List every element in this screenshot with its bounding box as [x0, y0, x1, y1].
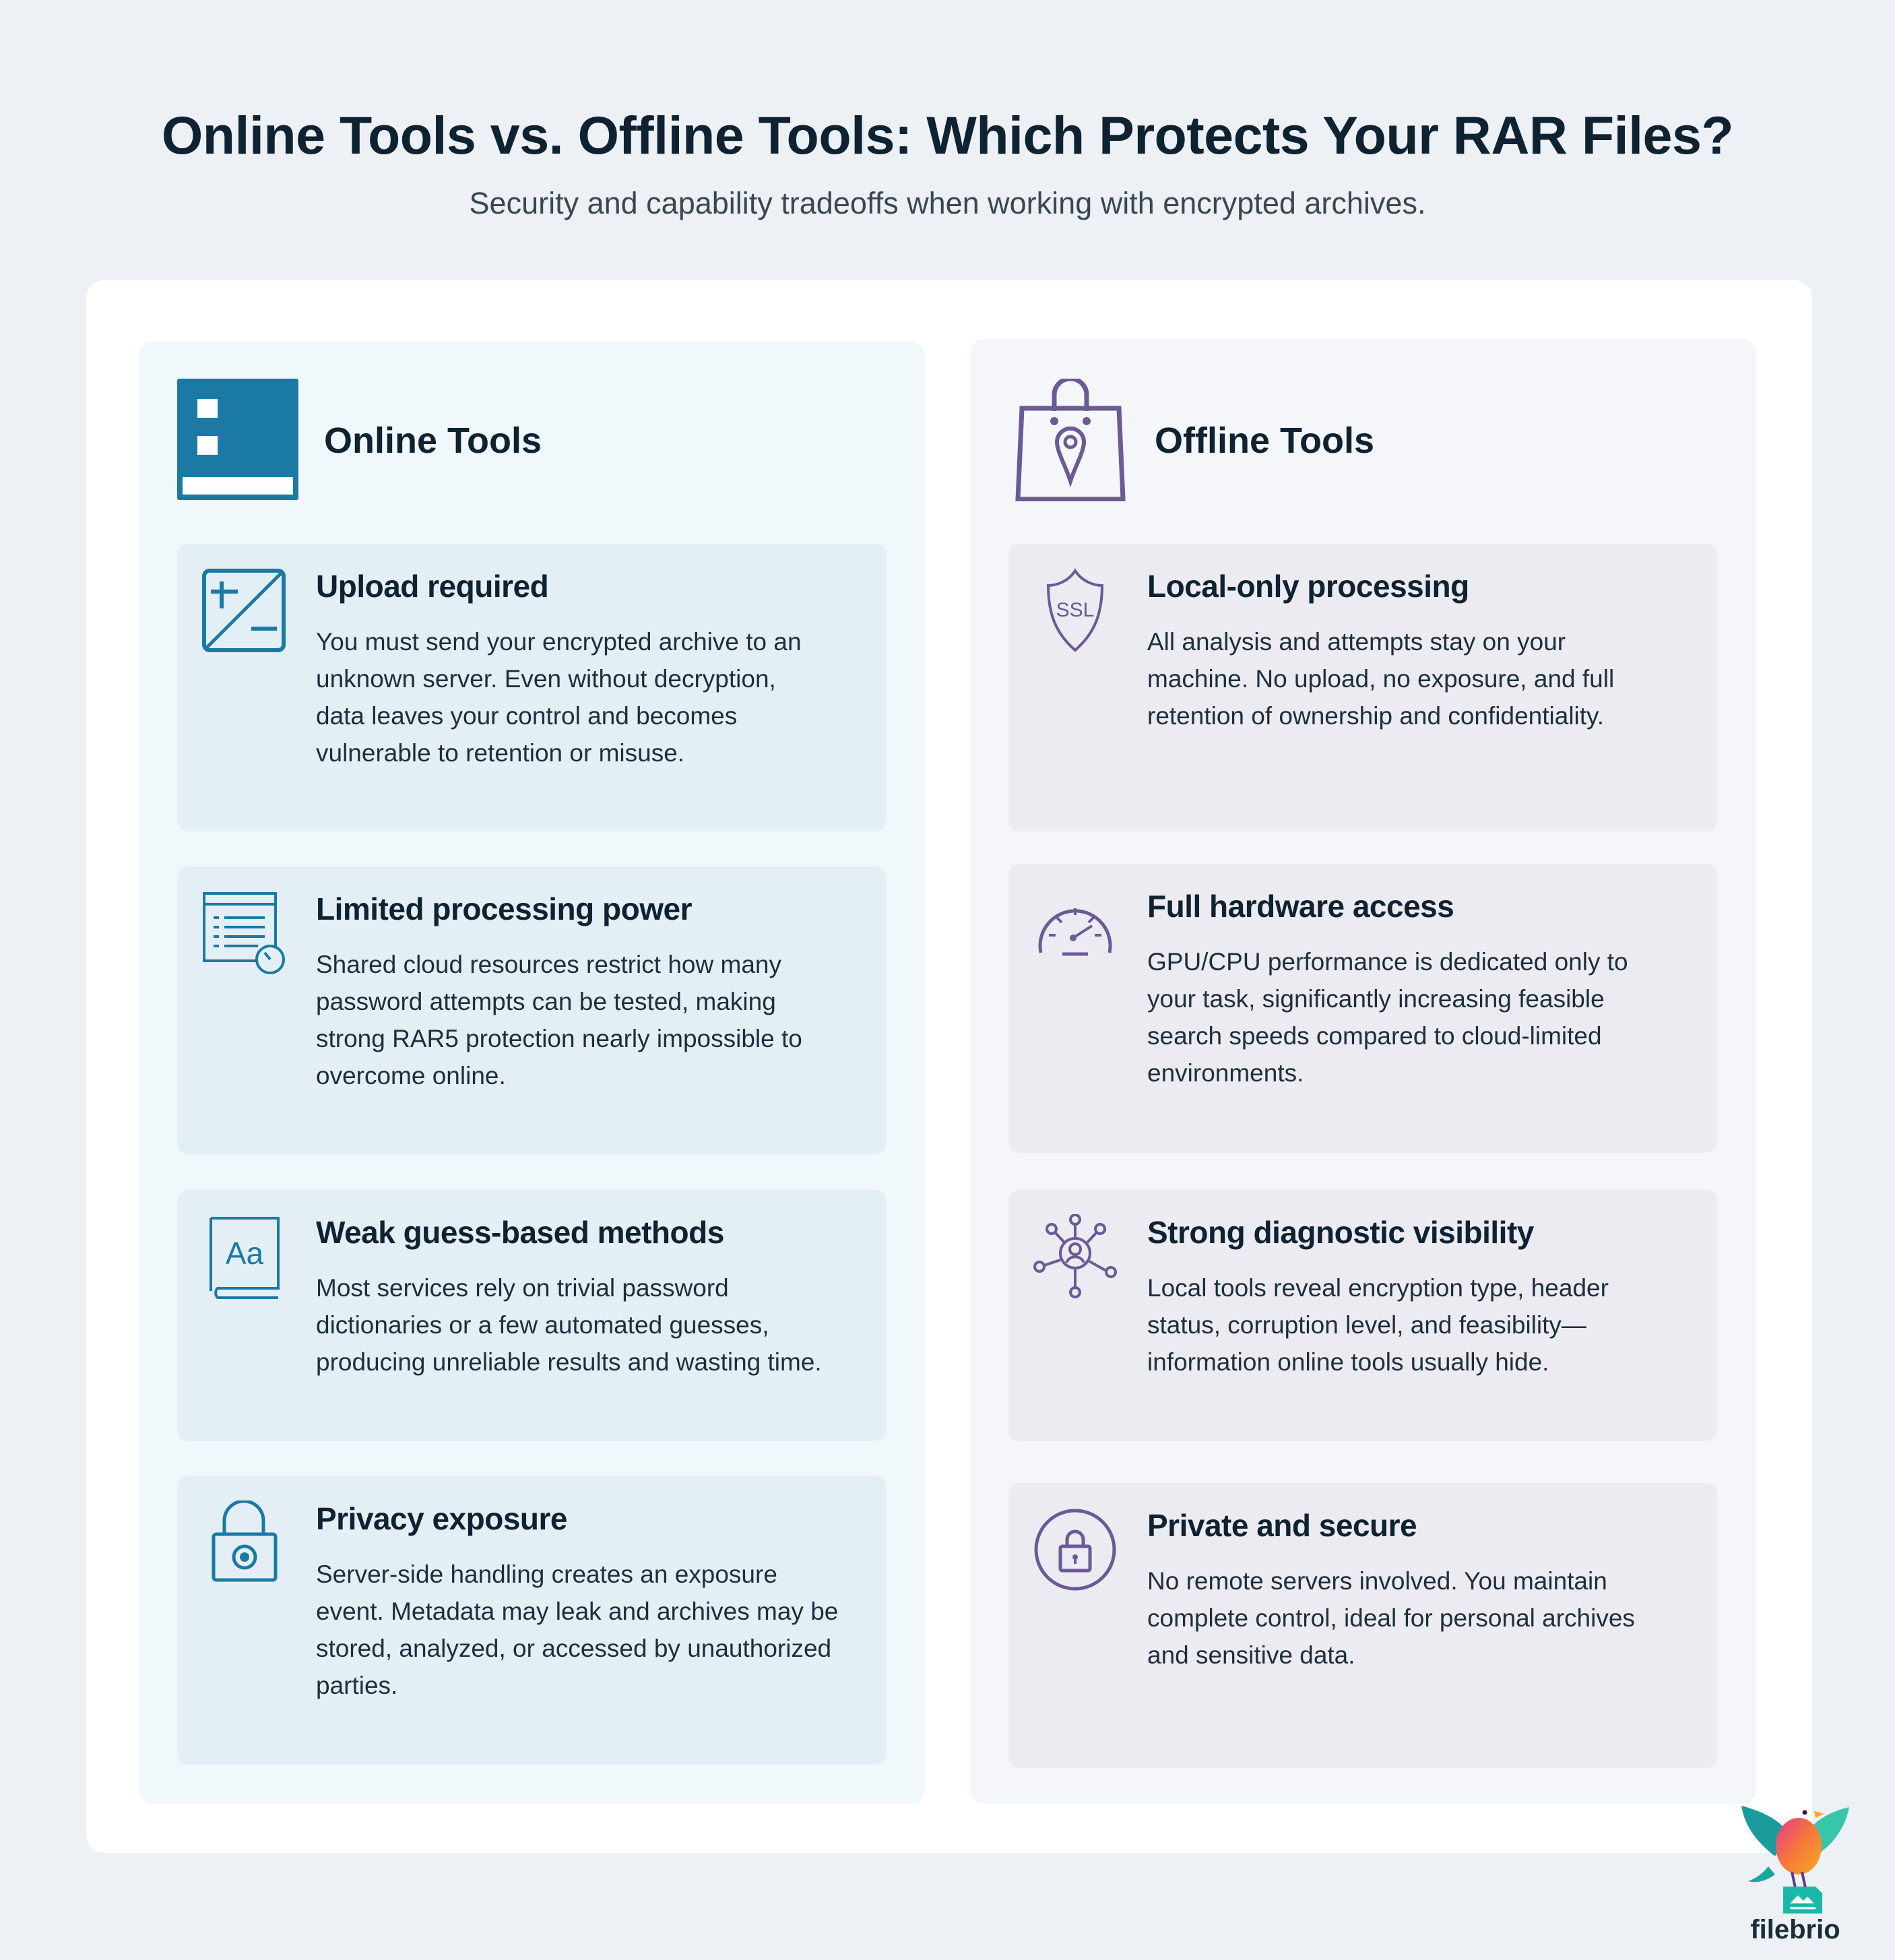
- item text: data leaves your control and becomes: [316, 702, 737, 730]
- icon: dictionary: [210, 1217, 280, 1299]
- icon: dictionary: Aa: [226, 1236, 264, 1271]
- item title: Strong diagnostic visibility: [1147, 1215, 1534, 1250]
- item text: event. Metadata may leak and archives may be: [316, 1598, 838, 1625]
- item text: Most services rely on trivial password: [316, 1274, 729, 1302]
- item text: All analysis and attempts stay on your: [1147, 628, 1566, 656]
- item text: [316, 951, 802, 1089]
- panel: offline tools: [970, 339, 1756, 1804]
- icon: bird on file: [1741, 1806, 1849, 1914]
- item: local-only processing: [1008, 544, 1717, 831]
- item text: unknown server. Even without decryption,: [316, 665, 776, 693]
- icon: network: [1033, 1214, 1117, 1298]
- item text: You must send your encrypted archive to an: [316, 628, 802, 656]
- item text: password attempts can be tested, making: [316, 988, 776, 1015]
- item text: retention of ownership and confidentiality.: [1147, 702, 1604, 730]
- item: strong diagnostic visibility: [1008, 1190, 1717, 1441]
- item title: Upload required: [316, 569, 548, 604]
- item text: [1147, 628, 1614, 730]
- item: upload required: [177, 544, 887, 831]
- item text: Local tools reveal encryption type, header: [1147, 1274, 1609, 1302]
- item text: status, corruption level, and feasibility—: [1147, 1311, 1586, 1339]
- icon: online tools header: [177, 379, 298, 500]
- item text: strong RAR5 protection nearly impossible to: [316, 1025, 802, 1052]
- item text: vulnerable to retention or misuse.: [316, 739, 684, 767]
- icon: SSL shield: [1047, 568, 1103, 652]
- logo: filebrio: [1741, 1806, 1849, 1945]
- icon: circled lock: [1035, 1509, 1116, 1590]
- item text: [1147, 1567, 1635, 1669]
- item: full hardware access: [1008, 864, 1717, 1153]
- icon: speedometer: [1039, 908, 1112, 955]
- item: weak guess-based methods: [177, 1190, 887, 1441]
- subtitle: Security and capability tradeoffs when working with encrypted archives.: [470, 186, 1425, 220]
- item text: overcome online.: [316, 1062, 506, 1089]
- item text: GPU/CPU performance is dedicated only to: [1147, 948, 1628, 976]
- item text: [1147, 948, 1628, 1087]
- item text: environments.: [1147, 1059, 1304, 1087]
- item text: [316, 1560, 838, 1699]
- item text: producing unreliable results and wasting time.: [316, 1348, 822, 1376]
- panel: online tools: [139, 342, 925, 1804]
- icon: SSL shield: SSL: [1056, 599, 1094, 621]
- item text: information online tools usually hide.: [1147, 1348, 1549, 1376]
- item text: complete control, ideal for personal archives: [1147, 1604, 1635, 1632]
- logo text: filebrio: [1750, 1915, 1840, 1945]
- heading: offline tools: Offline Tools: [1155, 420, 1374, 461]
- item text: [1147, 1274, 1609, 1376]
- item text: Server-side handling creates an exposure: [316, 1560, 777, 1588]
- icon: padlock: [212, 1500, 278, 1582]
- item text: [316, 628, 802, 767]
- item title: Weak guess-based methods: [316, 1215, 724, 1250]
- item text: and sensitive data.: [1147, 1641, 1355, 1669]
- item text: stored, analyzed, or accessed by unauthorized: [316, 1635, 831, 1662]
- item text: your task, significantly increasing feasible: [1147, 985, 1605, 1013]
- heading: online tools: Online Tools: [324, 420, 542, 461]
- item text: parties.: [316, 1672, 397, 1699]
- item title: Local-only processing: [1147, 569, 1469, 604]
- item text: search speeds compared to cloud-limited: [1147, 1022, 1602, 1050]
- item text: Shared cloud resources restrict how many: [316, 951, 781, 978]
- item title: Privacy exposure: [316, 1501, 567, 1536]
- title: Online Tools vs. Offline Tools: Which Protects Your RAR Files?: [162, 105, 1733, 165]
- item title: Private and secure: [1147, 1508, 1417, 1543]
- item: limited processing power: [177, 866, 887, 1154]
- icon: list with clock: [203, 892, 285, 974]
- item text: [316, 1274, 822, 1376]
- item title: Limited processing power: [316, 891, 692, 926]
- icon: shopping bag with pin: [1015, 379, 1126, 501]
- item title: Full hardware access: [1147, 889, 1454, 924]
- main card: [86, 280, 1812, 1853]
- item: privacy exposure: [177, 1476, 887, 1765]
- item text: dictionaries or a few automated guesses,: [316, 1311, 769, 1339]
- icon: plus minus: [202, 569, 286, 652]
- item: private and secure: [1008, 1483, 1717, 1768]
- item text: No remote servers involved. You maintain: [1147, 1567, 1607, 1595]
- item text: machine. No upload, no exposure, and full: [1147, 665, 1614, 693]
